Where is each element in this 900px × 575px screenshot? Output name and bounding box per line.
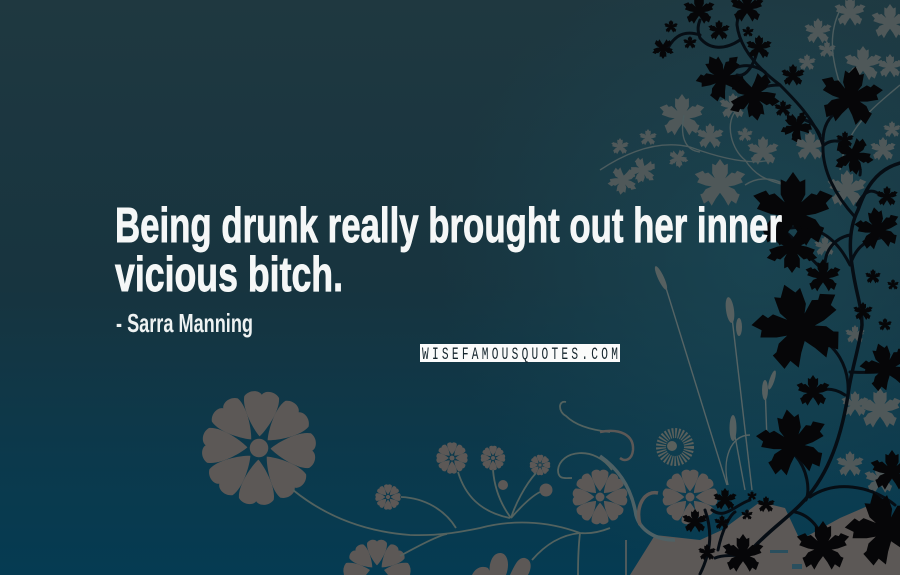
grey scroll <box>600 431 675 540</box>
watermark logo: WISEFAMOUSQUOTES.COM <box>422 346 618 365</box>
dandelion <box>661 433 689 461</box>
grey vines <box>600 10 900 190</box>
bottom flowers <box>343 470 717 575</box>
black floral branches <box>652 0 900 574</box>
small flowers <box>375 442 552 510</box>
black stems <box>668 12 900 574</box>
grey floral background <box>200 0 900 575</box>
author attribution: - Sarra Manning <box>116 308 253 338</box>
grey ground texture <box>625 502 900 575</box>
grey flower stems <box>293 402 612 575</box>
large flower <box>200 389 318 507</box>
grey leaf cluster <box>606 0 900 493</box>
black leaves <box>652 0 900 573</box>
grass stalks <box>662 275 767 490</box>
wheat heads <box>653 265 777 441</box>
quote line 2: vicious bitch. <box>115 248 343 302</box>
quote text <box>115 199 782 302</box>
